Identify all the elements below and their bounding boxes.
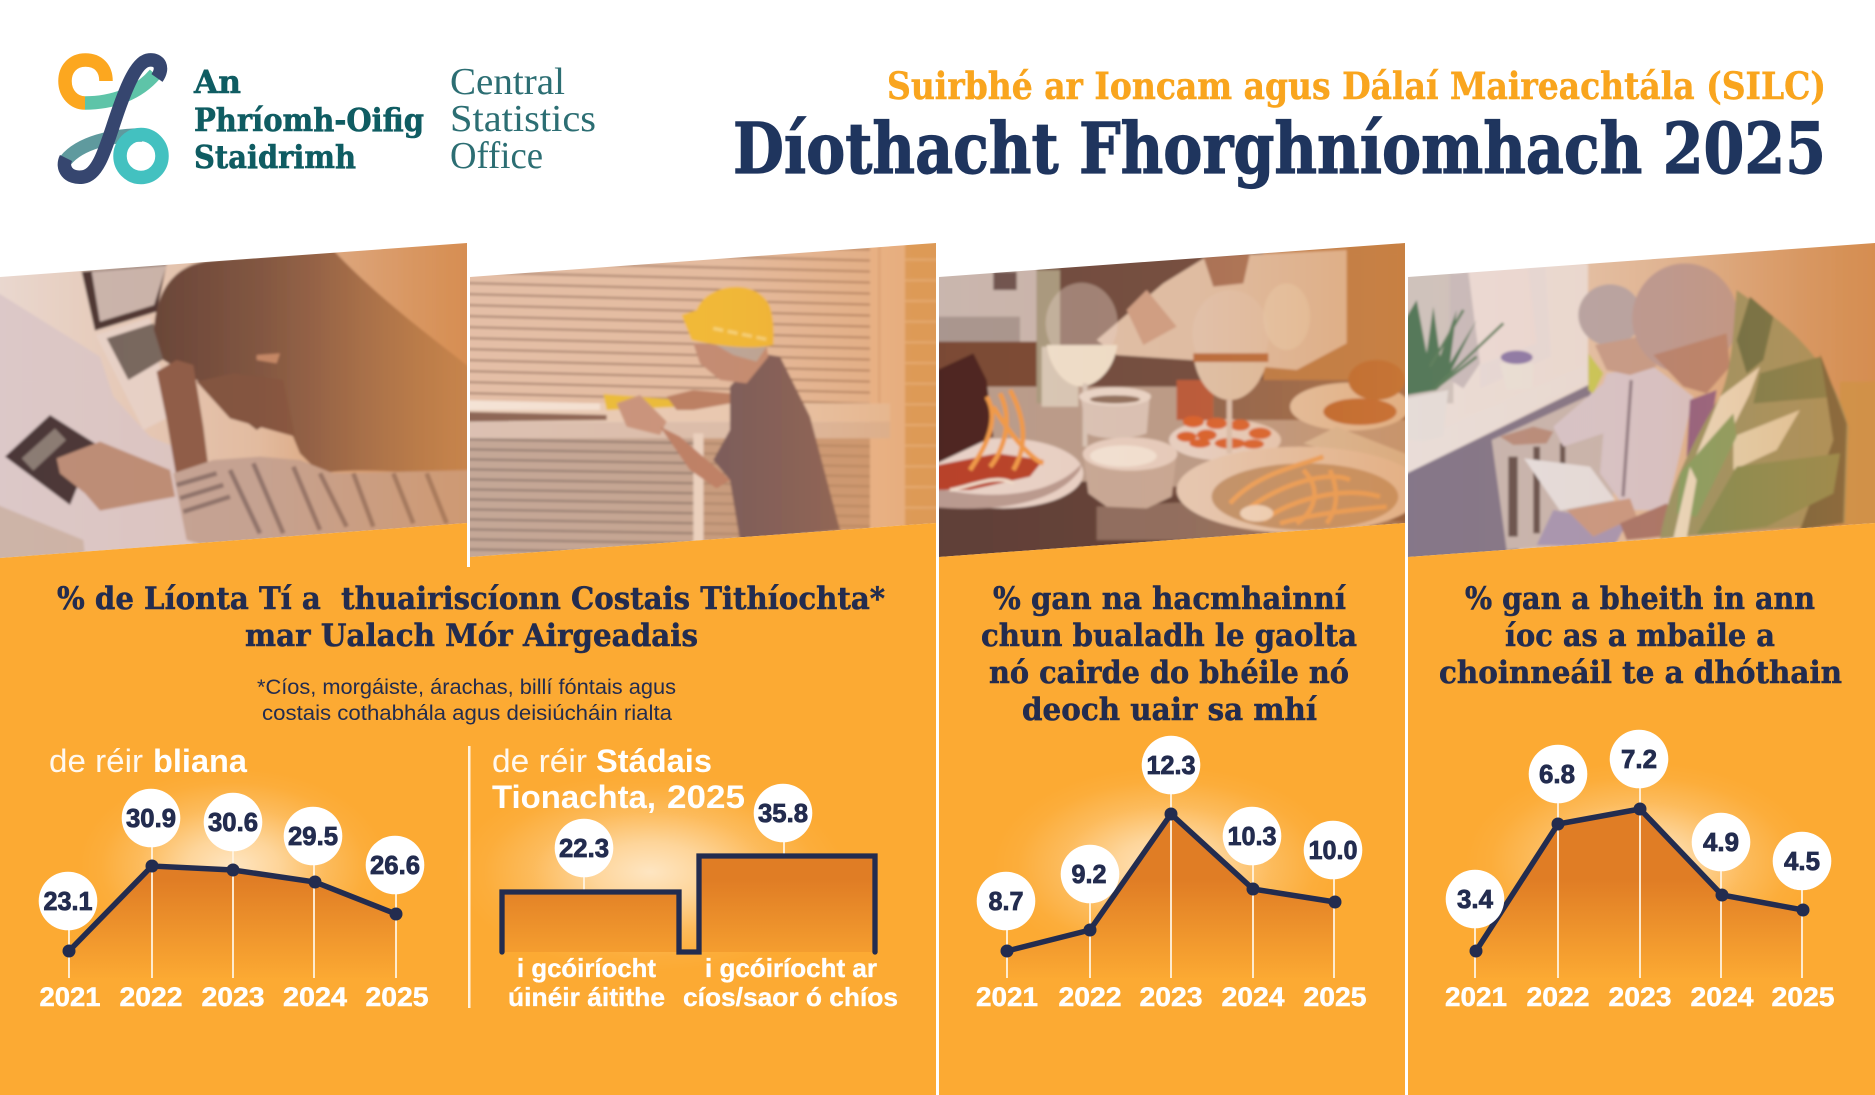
line chart: housing burden by year: 23.1 bbox=[44, 886, 92, 916]
line chart: housing burden by year: 2022 bbox=[120, 982, 182, 1012]
heading: meeting friends or family: nó cairde do bhéile nó bbox=[989, 655, 1349, 691]
line chart: cannot keep home warm: 2021 bbox=[1445, 982, 1507, 1012]
text: Irish name of office: Phríomh-Oifig bbox=[194, 101, 424, 139]
step chart: housing burden by tenure: úinéir áitithe bbox=[508, 982, 665, 1012]
heading: keeping home warm: choinneáil te a dhóthain bbox=[1439, 655, 1842, 691]
footnote: housing costs definition: costais cothabhála agus deisiúcháin rialta bbox=[262, 702, 672, 725]
footnote: housing costs definition bbox=[257, 676, 676, 725]
footnote: housing costs definition: *Cíos, morgáiste, árachas, billí fóntais agus bbox=[257, 676, 676, 699]
line chart: housing burden by year: 30.9 bbox=[126, 803, 176, 833]
heading: housing costs: mar Ualach Mór Airgeadais bbox=[245, 618, 698, 654]
heading: meeting friends or family bbox=[981, 581, 1357, 728]
line chart: cannot afford meal with friends: 2023 bbox=[1140, 982, 1202, 1012]
step chart: housing burden by tenure: i gcóiríocht ar bbox=[705, 953, 877, 983]
step chart: housing burden by tenure: 35.8 bbox=[758, 798, 808, 828]
line chart: cannot afford meal with friends: 9.2 bbox=[1072, 859, 1106, 889]
line chart: cannot afford meal with friends bbox=[976, 736, 1366, 1012]
text: Irish name of office bbox=[193, 63, 424, 176]
line chart: cannot afford meal with friends: 2021 bbox=[976, 982, 1038, 1012]
text: English name of office: Statistics bbox=[450, 98, 596, 140]
icon: CSO knot symbol bbox=[64, 60, 162, 178]
line chart: cannot afford meal with friends: 12.3 bbox=[1146, 750, 1196, 780]
chart heading: by year bbox=[49, 743, 247, 779]
line chart: cannot keep home warm bbox=[1445, 730, 1834, 1012]
chart heading: by tenure status 2025: Tionachta, bbox=[492, 779, 656, 815]
chart heading: by year: bliana bbox=[153, 743, 247, 779]
line chart: housing burden by year: 30.6 bbox=[208, 807, 258, 837]
photo: dinner table with pasta and wine bbox=[939, 243, 1405, 557]
line chart: cannot keep home warm: 2023 bbox=[1608, 982, 1672, 1012]
line chart: housing burden by year bbox=[39, 768, 428, 1012]
step chart: housing burden by tenure bbox=[455, 772, 898, 1012]
line chart: cannot keep home warm: 6.8 bbox=[1539, 759, 1575, 789]
line chart: housing burden by year: 2021 bbox=[40, 982, 100, 1012]
line chart: cannot afford meal with friends: 2022 bbox=[1058, 982, 1122, 1012]
photo: woman stressed with calculator and laptop bbox=[0, 233, 473, 577]
heading: keeping home warm: % gan a bheith in ann bbox=[1465, 581, 1815, 617]
line chart: cannot keep home warm: 2025 bbox=[1772, 982, 1834, 1012]
line chart: housing burden by year: 2023 bbox=[202, 982, 264, 1012]
line chart: cannot keep home warm: 7.2 bbox=[1621, 744, 1657, 774]
logo: Central Statistics Office bbox=[64, 60, 596, 178]
line chart: cannot keep home warm: 4.9 bbox=[1703, 827, 1739, 857]
line chart: cannot afford meal with friends: 2025 bbox=[1304, 982, 1366, 1012]
text: Irish name of office: Staidrimh bbox=[194, 138, 356, 176]
line chart: housing burden by year: 2025 bbox=[366, 982, 428, 1012]
text: English name of office bbox=[450, 61, 596, 177]
heading: housing costs: % de Líonta Tí a thuairiscíonn Costais Tithíochta* bbox=[57, 581, 885, 617]
chart heading: by tenure status 2025: de réir bbox=[492, 743, 587, 779]
chart heading: by tenure status 2025: Stádais bbox=[596, 743, 712, 779]
line chart: cannot keep home warm: 3.4 bbox=[1457, 884, 1494, 914]
line chart: housing burden by year: 29.5 bbox=[288, 821, 338, 851]
text: Irish name of office: An bbox=[193, 63, 241, 101]
line chart: cannot keep home warm: 2024 bbox=[1690, 982, 1754, 1012]
chart heading: by tenure status 2025 bbox=[492, 743, 745, 815]
line chart: cannot keep home warm: 2022 bbox=[1526, 982, 1590, 1012]
panel: housing costs background bbox=[0, 523, 936, 1095]
text: English name of office: Central bbox=[450, 61, 565, 103]
heading: keeping home warm bbox=[1439, 581, 1842, 691]
heading: meeting friends or family: deoch uair sa mhí bbox=[1022, 692, 1317, 728]
line chart: housing burden by year: 26.6 bbox=[370, 850, 420, 880]
chart heading: by year: de réir bbox=[49, 743, 143, 779]
heading: housing costs bbox=[57, 581, 885, 654]
line chart: cannot afford meal with friends: 8.7 bbox=[988, 886, 1024, 916]
line chart: cannot afford meal with friends: 10.3 bbox=[1228, 821, 1276, 851]
photo: elderly couple reading a bill by the radiator bbox=[1397, 237, 1875, 573]
chart heading: by tenure status 2025: 2025 bbox=[667, 779, 745, 815]
line chart: cannot afford meal with friends: 2024 bbox=[1222, 982, 1285, 1012]
panel: meeting friends background bbox=[939, 523, 1405, 1095]
step chart: housing burden by tenure: 22.3 bbox=[559, 833, 609, 863]
line chart: housing burden by year: 2024 bbox=[283, 982, 347, 1012]
panel: keeping home warm background bbox=[1408, 523, 1875, 1095]
text: English name of office: Office bbox=[450, 135, 543, 177]
step chart: housing burden by tenure: i gcóiríocht bbox=[517, 953, 656, 983]
heading: meeting friends or family: % gan na hacmhainní bbox=[993, 581, 1346, 617]
photo: worker in hard hat levelling window sill bbox=[460, 237, 942, 573]
step chart: housing burden by tenure: cíos/saor ó chíos bbox=[683, 982, 898, 1012]
line chart: cannot keep home warm: 4.5 bbox=[1784, 846, 1820, 876]
heading: meeting friends or family: chun bualadh le gaolta bbox=[981, 618, 1357, 654]
line chart: cannot afford meal with friends: 10.0 bbox=[1308, 835, 1358, 865]
heading: keeping home warm: íoc as a mbaile a bbox=[1505, 618, 1775, 654]
